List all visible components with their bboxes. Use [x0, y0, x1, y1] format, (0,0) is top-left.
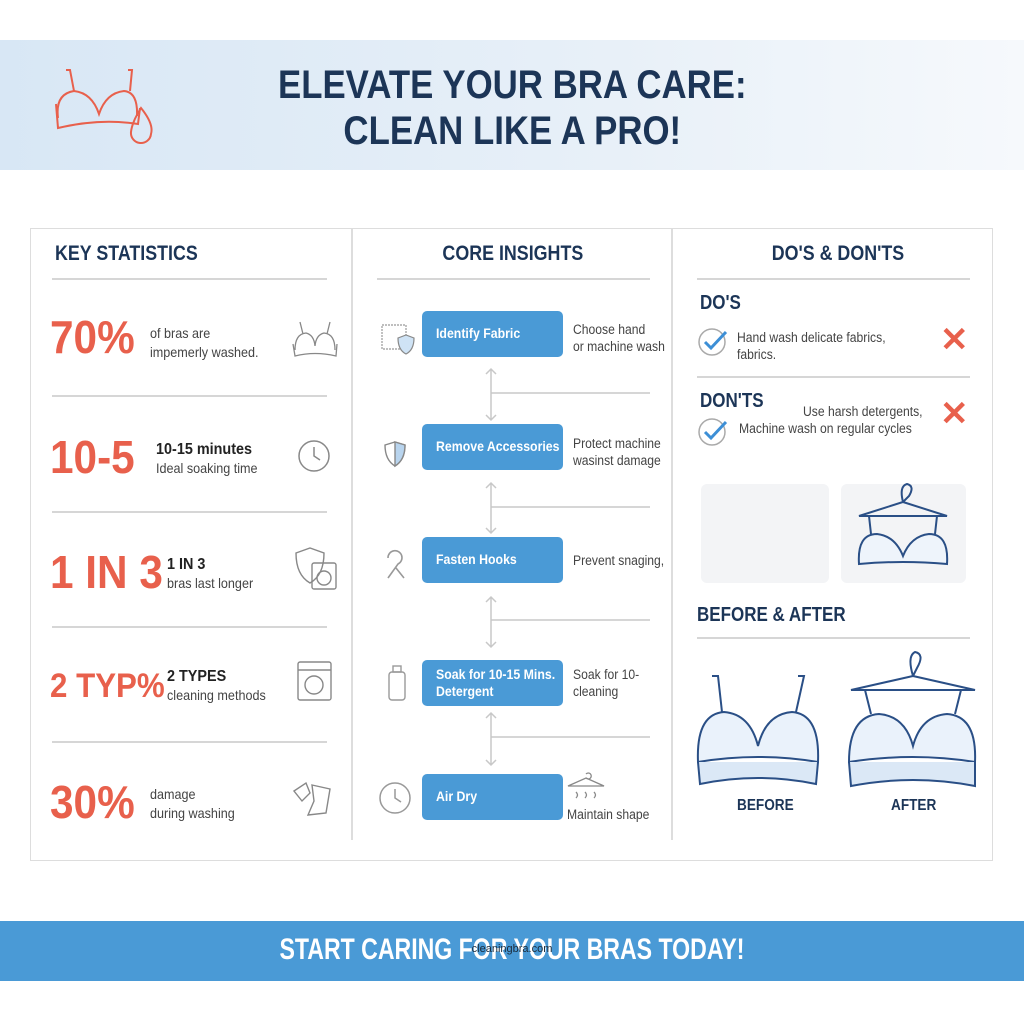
stat 1 in 3: 1 IN 3 — [50, 546, 163, 598]
footer banner — [0, 921, 1024, 981]
text: wasinst damage — [573, 453, 661, 468]
text: Choose hand — [573, 322, 645, 337]
step 4 — [422, 660, 563, 706]
footer banner: START CARING FOR YOUR BRAS TODAY! — [279, 933, 745, 966]
don'ts: DON'TS — [700, 390, 764, 412]
text: Maintain shape — [567, 807, 649, 822]
stat 30%: 30% — [50, 776, 135, 828]
stat 30%: damage — [150, 786, 196, 802]
heading: DO'S & DON'TS — [771, 242, 904, 265]
title: CLEAN LIKE A PRO! — [343, 109, 681, 153]
don'ts — [698, 390, 968, 446]
don'ts: ✕ — [940, 395, 968, 433]
header band — [0, 40, 1024, 170]
do's: ✕ — [940, 321, 968, 359]
stat 30% — [50, 776, 331, 828]
stat 2 types: 2 TYPES — [167, 668, 226, 685]
stat 30%: during washing — [150, 805, 235, 821]
do's — [698, 292, 968, 362]
do's: fabrics. — [737, 347, 776, 362]
icon: bra with drop — [55, 69, 153, 144]
stat 2 types: 2 TYP% — [50, 667, 165, 705]
title — [278, 63, 746, 153]
stat 1 in 3: 1 IN 3 — [167, 556, 205, 573]
text: or machine wash — [573, 339, 665, 354]
text: Soak for 10- — [573, 667, 639, 682]
step 1: Identify Fabric — [436, 325, 520, 341]
step 5: Air Dry — [436, 788, 477, 804]
before & after: BEFORE & AFTER — [697, 604, 846, 626]
main panel — [30, 228, 993, 861]
connectors — [486, 368, 650, 766]
stat 2 types — [50, 661, 332, 705]
step 5 — [422, 774, 563, 820]
stat 10-5: Ideal soaking time — [156, 460, 258, 476]
step 1 — [422, 311, 563, 357]
stat 70%: impemerly washed. — [150, 344, 259, 360]
stat 70%: of bras are — [150, 325, 210, 341]
panel: do's and don'ts: AFTER — [891, 797, 936, 814]
stat 1 in 3: bras last longer — [167, 575, 253, 591]
stat 2 types: cleaning methods — [167, 687, 266, 703]
image placeholders — [701, 484, 829, 583]
stat 1 in 3 — [50, 546, 337, 598]
stat 10-5 — [50, 431, 330, 483]
step 2 — [422, 424, 563, 470]
panel: key statistics — [50, 242, 338, 828]
step 2: Remove Accessories — [436, 438, 560, 454]
step 3 — [422, 537, 563, 583]
heading: KEY STATISTICS — [55, 242, 198, 265]
step 3: Fasten Hooks — [436, 551, 517, 567]
text: cleaning — [573, 684, 618, 699]
don'ts: Machine wash on regular cycles — [739, 421, 912, 436]
before bra — [696, 675, 820, 786]
stat 10-5: 10-5 — [50, 431, 135, 483]
text: Protect machine — [573, 436, 661, 451]
do's: Hand wash delicate fabrics, — [737, 330, 886, 345]
step 4: Detergent — [436, 683, 494, 699]
heading: CORE INSIGHTS — [442, 242, 583, 265]
after bra — [848, 651, 976, 788]
do's: DO'S — [700, 292, 741, 314]
text: Prevent snaging, — [573, 553, 664, 568]
title: ELEVATE YOUR BRA CARE: — [278, 63, 746, 107]
don'ts: Use harsh detergents, — [803, 404, 923, 419]
step 4: Soak for 10-15 Mins. — [436, 666, 555, 682]
panel: do's and don'ts: BEFORE — [737, 797, 794, 814]
footer banner: cleaningbra.com — [472, 943, 552, 955]
stat 10-5: 10-15 minutes — [156, 441, 252, 458]
panel: do's and don'ts — [696, 242, 976, 814]
stat 70%: 70% — [50, 311, 135, 363]
stat 70% — [50, 311, 338, 363]
